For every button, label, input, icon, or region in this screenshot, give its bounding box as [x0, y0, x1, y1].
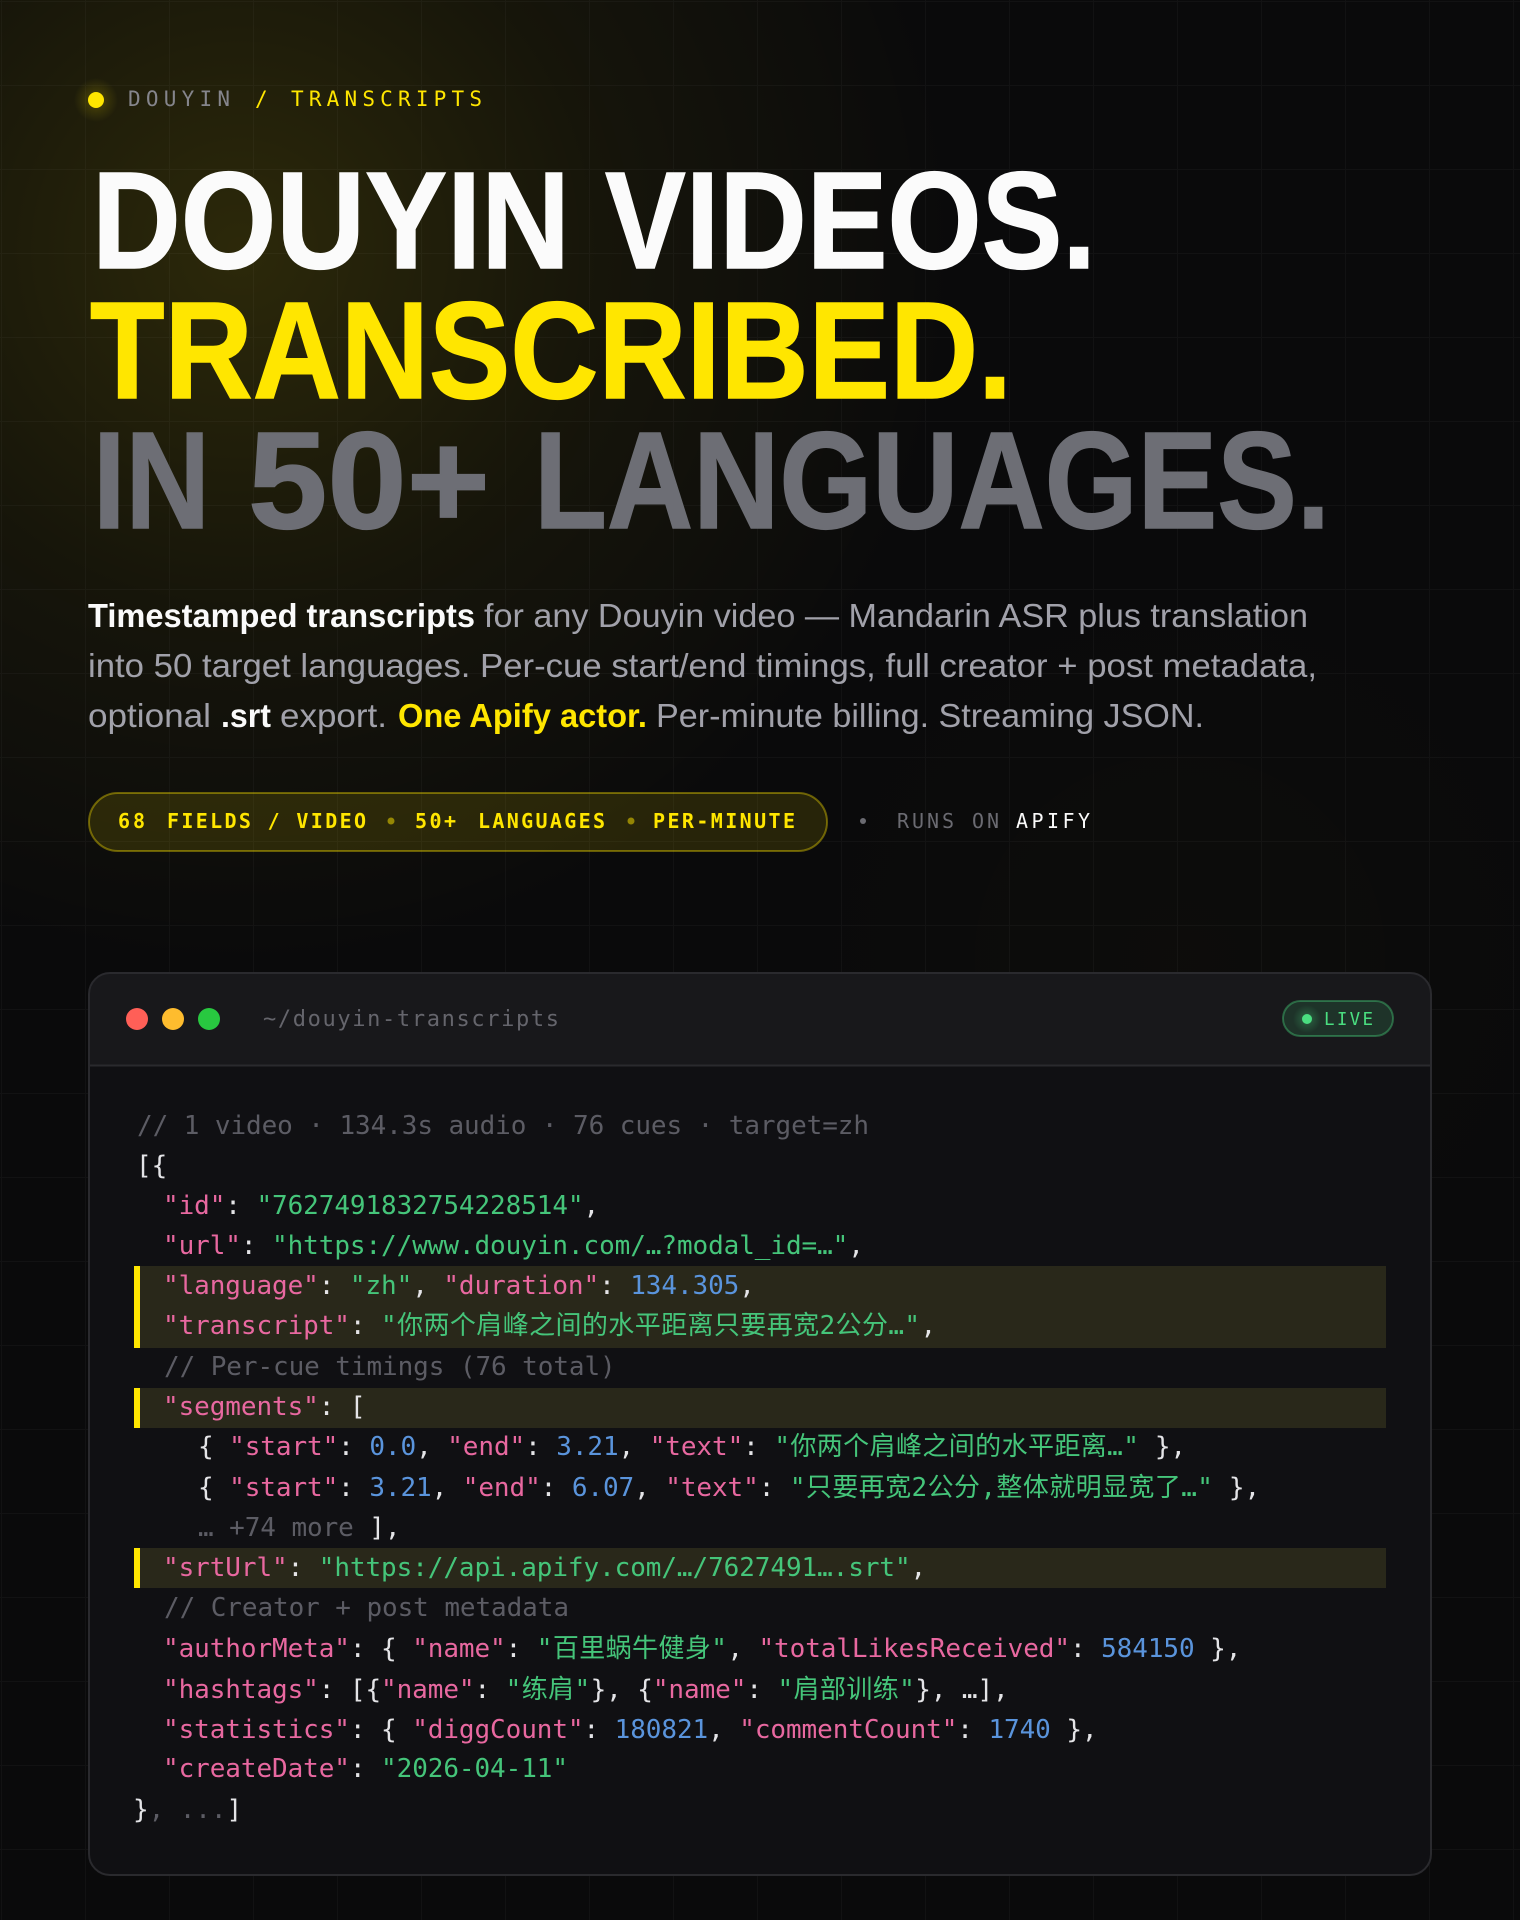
closing bracket: }, ...]: [133, 1795, 242, 1825]
live badge: LIVE: [1324, 1010, 1373, 1030]
description line 2: into 50 target languages. Per-cue start/end timings, full creator + post metadata,: [88, 647, 1317, 684]
comment: creator metadata: // Creator + post metadata: [164, 1593, 569, 1623]
pill text: LANGUAGES: [478, 809, 605, 833]
open bracket: [{: [136, 1151, 167, 1181]
description line 3: optional: [88, 697, 211, 734]
eyebrow text: /: [255, 87, 268, 111]
description paragraph: [88, 597, 1317, 734]
createDate row: "createDate": "2026-04-11": [163, 1754, 568, 1784]
terminal title bar: [90, 1000, 1430, 1066]
description line 3: One Apify actor.: [398, 697, 647, 734]
window path: ~/douyin-transcripts: [263, 1007, 559, 1032]
authorMeta row: "authorMeta": { "name": "百里蜗牛健身", "totalLikesReceived": 584150 },: [163, 1634, 1241, 1664]
url row: "url": "https://www.douyin.com/…?modal_id=…",: [163, 1231, 864, 1261]
comment: per-cue timings: // Per-cue timings (76 total): [164, 1352, 616, 1382]
headline line 1: VIDEOS.: [605, 144, 1096, 298]
segment 2: { "start": 3.21, "end": 6.07, "text": "只要再宽2公分,整体就明显宽了…" },: [198, 1473, 1260, 1503]
comment line: // 1 video · 134.3s audio · 76 cues · target=zh: [137, 1111, 869, 1141]
pill text: 50+: [415, 809, 456, 833]
runs on Apify label: APIFY: [1016, 809, 1090, 833]
srtUrl row: "srtUrl": "https://api.apify.com/…/7627491….srt",: [163, 1553, 926, 1583]
description line 1: Timestamped transcripts: [88, 597, 475, 634]
headline line 3: IN: [93, 404, 210, 558]
code block: JSON output: [133, 1111, 1260, 1825]
eyebrow text: TRANSCRIPTS: [291, 87, 482, 111]
headline line 1: DOUYIN: [92, 144, 570, 298]
more segments: … +74 more ],: [198, 1513, 400, 1543]
description line 3: .srt: [221, 697, 271, 734]
description line 3: export.: [280, 697, 387, 734]
transcript row: "transcript": "你两个肩峰之间的水平距离只要再宽2公分…",: [163, 1311, 936, 1341]
stat pill: fields, languages, per-minute: [89, 793, 827, 851]
id row: "id": "7627491832754228514",: [163, 1191, 599, 1221]
segment 1: { "start": 0.0, "end": 3.21, "text": "你两个肩峰之间的水平距离…" },: [198, 1432, 1186, 1462]
pill text: FIELDS / VIDEO: [167, 809, 366, 833]
panel: terminal window: [89, 973, 1431, 1875]
statistics row: "statistics": { "diggCount": 180821, "commentCount": 1740 },: [163, 1715, 1097, 1745]
description line 3: Per-minute billing. Streaming JSON.: [656, 697, 1204, 734]
language row: "language": "zh", "duration": 134.305,: [163, 1271, 755, 1301]
pill separators: [388, 818, 634, 824]
pill text: PER-MINUTE: [653, 809, 795, 833]
headline line 3: LANGUAGES.: [534, 404, 1330, 558]
runs on Apify label: [860, 809, 1090, 833]
segments row: "segments": [: [163, 1392, 365, 1422]
runs on Apify label: RUNS ON: [897, 809, 999, 833]
title: three-line headline: [90, 144, 1330, 558]
icon: yellow status dot: [74, 78, 118, 122]
eyebrow text: DOUYIN: [128, 87, 230, 111]
window control dots: [126, 1008, 220, 1030]
pill text: 68: [118, 809, 145, 833]
headline line 2: TRANSCRIBED.: [90, 274, 1012, 428]
hashtags row: "hashtags": [{"name": "练肩"}, {"name": "肩部训练"}, …],: [163, 1675, 1009, 1705]
description line 1: for any Douyin video — Mandarin ASR plus translation: [484, 597, 1308, 634]
headline line 3: 50+: [248, 404, 490, 558]
live badge: [1283, 1001, 1393, 1036]
highlighted rows: [134, 1266, 1386, 1588]
eyebrow: Douyin / Transcripts: [74, 78, 482, 122]
